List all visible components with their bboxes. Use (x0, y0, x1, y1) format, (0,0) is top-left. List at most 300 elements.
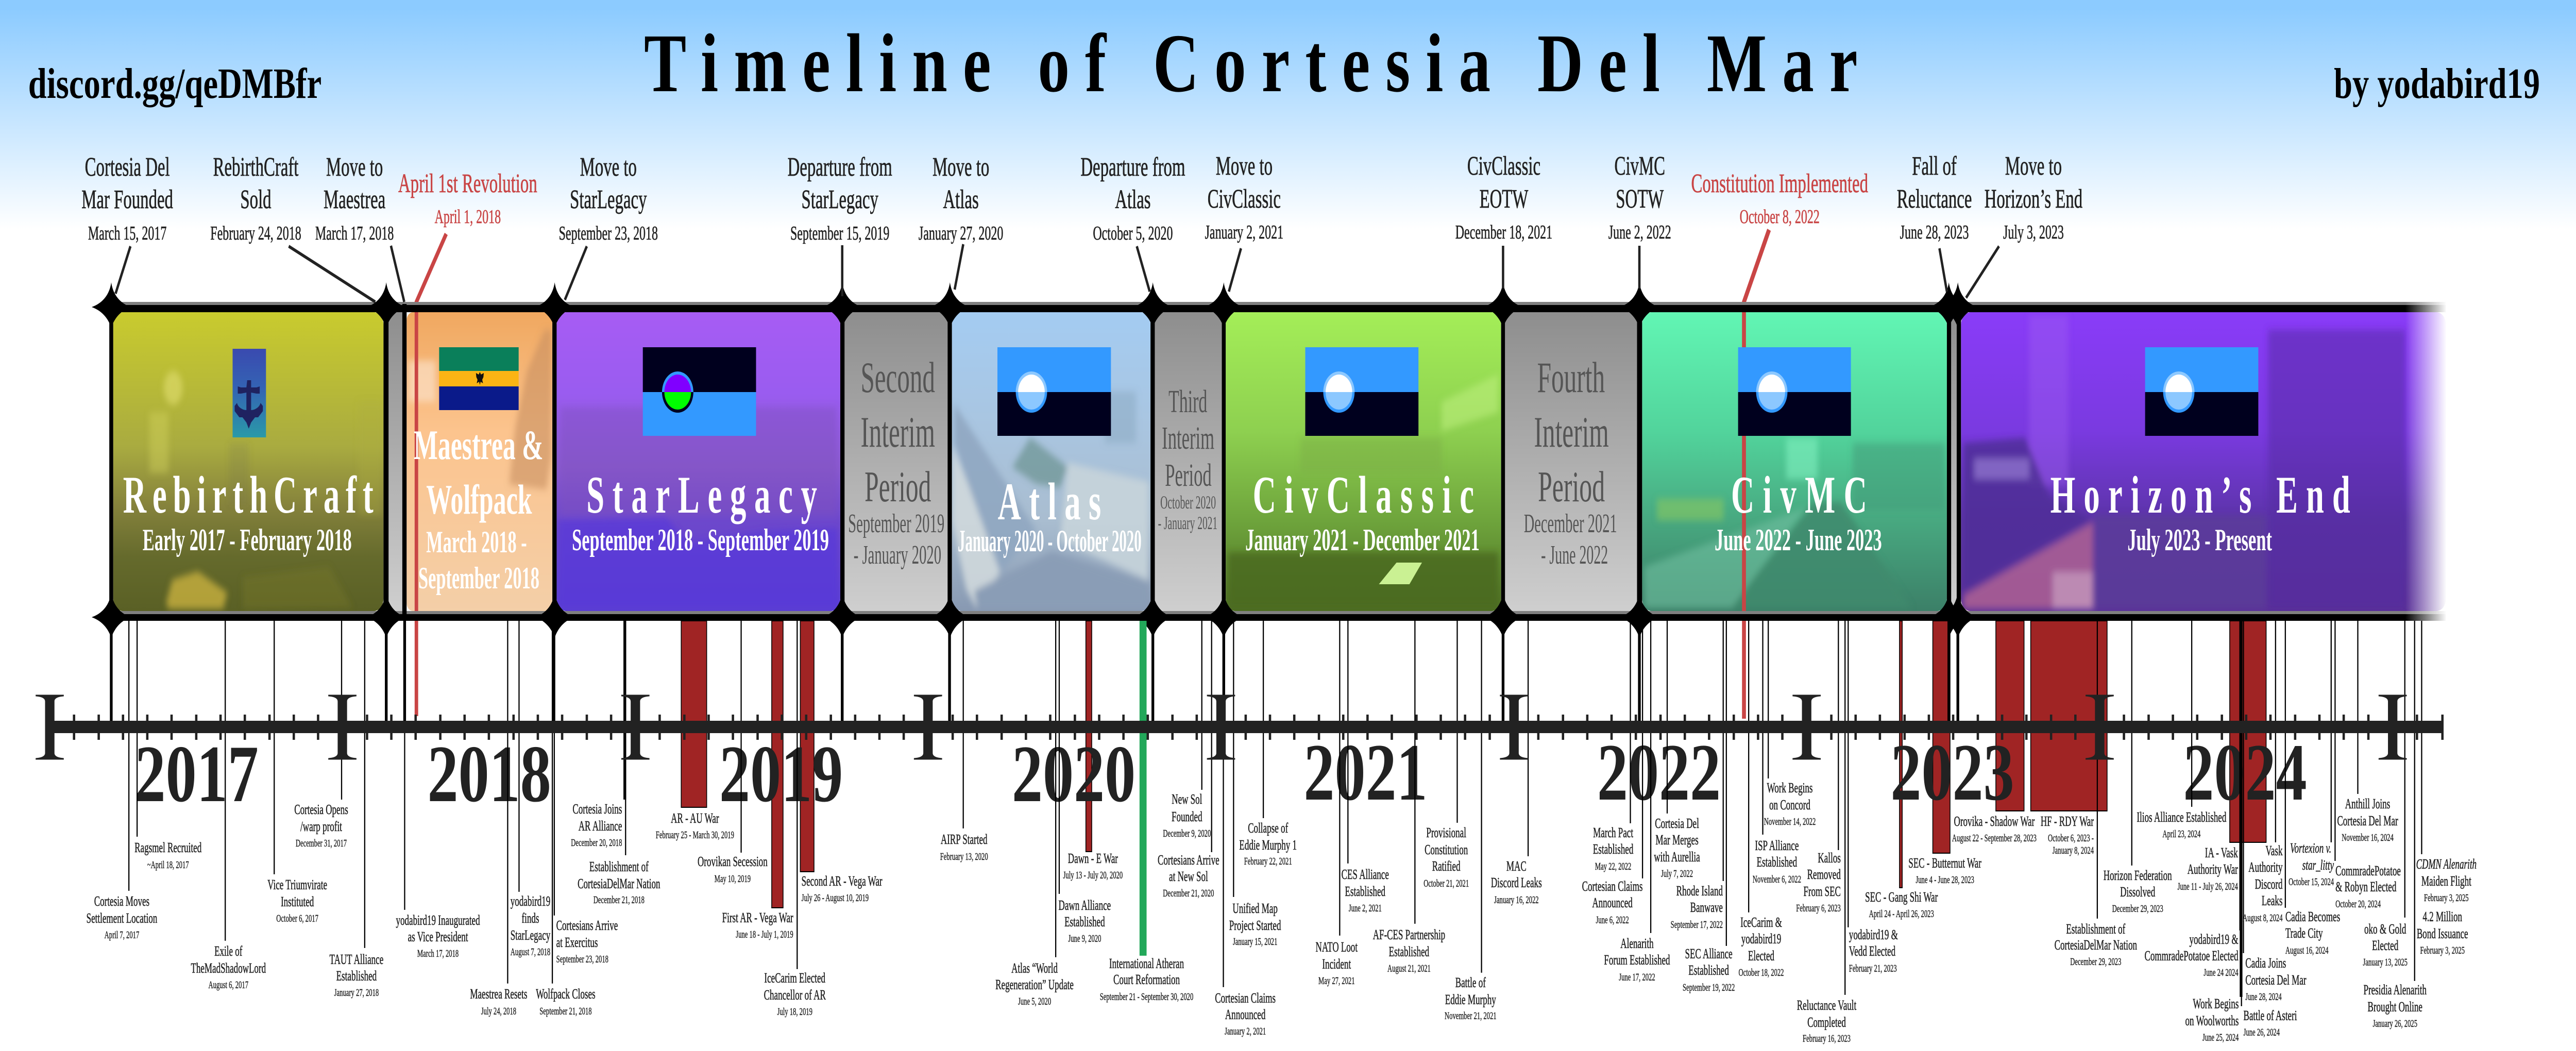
label: IceCarim Elected Chancellor of AR: July 18, 2019 (777, 1006, 812, 1018)
label: Atlas World Regeneration Update: Atlas “World (1011, 960, 1058, 976)
label: AF-CES Partnership Established: Established (1389, 944, 1429, 959)
label: Kallos Removed From SEC: February 6, 2023 (1796, 902, 1841, 914)
top label: Move to Maestrea: Maestrea (324, 185, 385, 214)
label: Cadia Joins Cortesia Del Mar: Cadia Joins (2245, 955, 2286, 971)
label: Reluctance Vault Completed: Reluctance Vault (1797, 997, 1857, 1013)
label: Work Begins on Woolworths: Work Begins (2193, 996, 2239, 1011)
panel: Maestrea and Wolfpack era (406, 312, 552, 611)
label: yodabird19 Inaugurated as Vice President (396, 912, 480, 959)
label: Establishment of CortesiaDelMar Nation: CortesiaDelMar Nation (578, 876, 660, 891)
top label: Cortesia Del Mar Founded: Mar Founded (81, 185, 173, 214)
label: Cadia Becomes Trade City: August 16, 2024 (2285, 944, 2329, 956)
era title: Fourth Interim Period: Period (1538, 463, 1605, 511)
label: Cortesians Arrive at Exercitus: Cortesians Arrive (556, 918, 618, 933)
label: Second AR - Vega War: July 26 - August 10, 2019 (802, 892, 869, 904)
label: Battle of Asteri: June 26, 2024 (2243, 1026, 2280, 1038)
label: Alenarith Forum Established: Alenarith (1620, 936, 1654, 951)
label: Wolfpack Closes: September 21, 2018 (539, 1005, 592, 1017)
label: Ragsmel Recruited (134, 840, 201, 871)
label: Presidia Alenarith Brought Online (2363, 982, 2427, 1029)
label: Provisional Constitution Ratified: October 21, 2021 (1423, 877, 1469, 889)
label: Anthill Joins Cortesia Del Mar (2337, 796, 2398, 843)
label: March Pact Established: Established (1593, 841, 1633, 857)
panel: Second Interim Period (844, 312, 947, 611)
top label: Move to Atlas: Atlas (943, 185, 979, 214)
label: Dawn Alliance Established (1059, 897, 1111, 944)
label: Orovika - Shadow War: August 22 - September 28, 2023 (1952, 832, 2037, 844)
label: Vortexion v. star_litty: Vortexion v. (2290, 840, 2331, 856)
label: Dawn Alliance Established: Dawn Alliance (1059, 897, 1111, 913)
top label: Departure from Atlas: Departure from (1080, 152, 1185, 182)
label: Second AR - Vega War: Second AR - Vega War (802, 873, 883, 889)
label: Cortesia Opens /warp profit: /warp profit (300, 819, 342, 834)
label: IceCarim Elected Chancellor of AR (764, 970, 826, 1018)
era title: Second Interim Period: Period (865, 463, 931, 511)
label: yodabird19 finds StarLegacy: finds (521, 910, 539, 926)
era title: CivClassic: January 2021 - December 2021 (1245, 523, 1480, 557)
label: CDMN Alenarith Maiden Flight (2416, 856, 2477, 904)
label: Ragsmel Recruited: Ragsmel Recruited (134, 840, 201, 855)
year numeral 2022: 2022 (1597, 727, 1721, 818)
panel: StarLegacy era (556, 312, 840, 611)
label: Horizon Federation Dissolved (2104, 868, 2172, 914)
label: Alenarith Forum Established: June 17, 2022 (1619, 971, 1655, 983)
label: ISP Alliance Established: Established (1757, 854, 1797, 870)
title: Timeline of Cortesia Del Mar (644, 18, 1858, 110)
era title: RebirthCraft: Early 2017 - February 2018 (143, 523, 352, 557)
label: CDMN Alenarith Maiden Flight: February 3, 2025 (2424, 892, 2469, 904)
label: New Sol Founded: December 9, 2020 (1163, 827, 1211, 839)
era title: Third Interim Period: Third (1168, 384, 1207, 419)
label: SEC - Butternut War: SEC - Butternut War (1908, 855, 1981, 871)
label: Ilios Alliance Established: April 23, 2024 (2162, 828, 2201, 840)
label: Atlas World Regeneration Update: Regeneration” Update (995, 977, 1074, 992)
era title: Fourth Interim Period: - June 2022 (1541, 540, 1608, 569)
red marker: April 1st Revolution (416, 234, 446, 716)
label: New Sol Founded: Founded (1172, 809, 1202, 824)
label: Atlas World Regeneration Update: June 5, 2020 (1018, 995, 1051, 1007)
label: Battle of Eddie Murphy: Battle of (1455, 975, 1486, 990)
label: yodabird19 finds StarLegacy (511, 893, 551, 958)
label: Work Begins on Woolworths: on Woolworths (2185, 1013, 2239, 1028)
label: NATO Loot Incident: NATO Loot (1316, 939, 1358, 955)
top label: CivClassic EOTW: December 18, 2021 (1455, 222, 1552, 243)
label: yodabird19 and CommradePotatoe Elected: yodabird19 & (2190, 931, 2239, 947)
label: International Atheran Court Reformation: September 21 - September 30, 2020 (1100, 991, 1193, 1003)
label: Cortesia Joins AR Alliance: AR Alliance (579, 818, 622, 834)
label: Cortesia Del Mar Merges with Aurellia (1654, 816, 1700, 879)
label: ISP Alliance Established: ISP Alliance (1755, 838, 1799, 853)
label: Rhode Island Banwave: Banwave (1690, 900, 1723, 915)
label: Cortesia Moves Settlement Location (87, 893, 157, 941)
year numeral 2024: 2024 (2183, 727, 2307, 818)
label: Vortexion v. star_litty (2289, 840, 2334, 888)
era title: StarLegacy: September 2018 - September 2019 (572, 523, 829, 557)
label: International Atheran Court Reformation: Court Reformation (1113, 972, 1180, 987)
label: yodabird19 and Vedd Elected: yodabird19 & (1849, 927, 1898, 942)
top label: Constitution Implemented (1691, 169, 1868, 227)
top label: Fall of Reluctance (1897, 151, 1972, 243)
label: Work Begins on Woolworths: June 25, 2024 (2202, 1031, 2239, 1043)
label: Ilios Alliance Established (2137, 809, 2226, 840)
top label: Cortesia Del Mar Founded: March 15, 2017 (88, 223, 166, 244)
right edge fade (2405, 299, 2447, 623)
label: CommradePotatoe and Robyn Elected: October 20, 2024 (2335, 898, 2381, 910)
label: Cortesia Joins AR Alliance: December 20, 2018 (571, 837, 622, 849)
event connector lines (129, 621, 2421, 1006)
label: Cortesia Joins AR Alliance: Cortesia Joins (572, 801, 622, 817)
top label: Move to StarLegacy: StarLegacy (570, 185, 647, 214)
label: Horizon Federation Dissolved: Dissolved (2120, 884, 2155, 900)
label: Kallos Removed From SEC (1796, 850, 1841, 914)
label: Vortexion v. star_litty: October 15, 2024 (2289, 876, 2334, 888)
label: Work Begins on Concord: Work Begins (1767, 780, 1812, 795)
label: SEC Alliance Established: SEC Alliance (1685, 946, 1733, 961)
top label: Move to Atlas: Move to (933, 152, 989, 182)
label: HF - RDY War: January 8, 2024 (2053, 844, 2094, 856)
top label: Move to Horizon's End (1985, 151, 2082, 243)
label: CDMN Alenarith Maiden Flight: CDMN Alenarith (2416, 856, 2477, 872)
top label: Constitution Implemented: October 8, 2022 (1740, 206, 1820, 227)
label: Battle of Eddie Murphy: Eddie Murphy (1445, 992, 1496, 1007)
label: yodabird19 Inaugurated as Vice President: as Vice President (408, 929, 468, 944)
label: Cortesian Claims Announced 2022 (1582, 878, 1642, 926)
label: Second AR - Vega War (802, 873, 883, 904)
top label: Move to Atlas (919, 152, 1003, 244)
top label: RebirthCraft Sold: February 24, 2018 (210, 223, 301, 244)
label: CommradePotatoe and Robyn Elected: & Robyn Elected (2335, 879, 2396, 894)
era title: CivMC: June 2022 - June 2023 (1715, 523, 1882, 557)
era title: Second Interim Period (848, 354, 944, 569)
panel: CivMC era (1642, 312, 1947, 611)
label: Collapse of Eddie Murphy 1 (1239, 820, 1297, 867)
label: CES Alliance Established: June 2, 2021 (1349, 902, 1382, 914)
label: Work Begins on Woolworths (2185, 996, 2239, 1043)
icon: StarLegacy flag (643, 347, 756, 436)
top label: Move to CivClassic: January 2, 2021 (1205, 222, 1283, 243)
label: Collapse of Eddie Murphy 1: Eddie Murphy 1 (1239, 837, 1297, 853)
year numeral 2019: 2019 (719, 729, 843, 819)
label: Unified Map Project Started: Project Started (1229, 918, 1281, 933)
label: Rhode Island Banwave (1671, 883, 1723, 930)
era title: Horizon's End: Horizon’s End (2050, 466, 2350, 524)
label: SEC - Butternut War (1908, 855, 1981, 886)
label: Maestrea Resets (470, 986, 527, 1017)
label: MAC Discord Leaks: MAC (1506, 858, 1527, 874)
label: 4.2 Million Bond Issuance: Bond Issuance (2417, 926, 2468, 941)
label: Orovikan Secession: Orovikan Secession (698, 854, 768, 869)
label: AF-CES Partnership Established (1373, 927, 1445, 974)
era title: Atlas: Atlas (998, 472, 1101, 531)
label: Establishment of CortesiaDelMar Nation 2023: Establishment of (2066, 921, 2126, 937)
label: Wolfpack Closes (536, 986, 596, 1017)
top label: April 1st Revolution: April 1, 2018 (435, 206, 501, 227)
label: Cortesian Claims Announced 2022: Cortesian Claims (1582, 878, 1642, 894)
label: IA - Vask Authority War (2178, 845, 2238, 892)
label: IceCarim and yodabird19 Elected: October 18, 2022 (1739, 967, 1784, 978)
top label: Move to StarLegacy (559, 152, 658, 244)
era title: Maestrea and Wolfpack: September 2018 (418, 561, 539, 596)
label: Vice Triumvirate Instituted: October 6, 2017 (276, 912, 318, 924)
label: yodabird19 and Vedd Elected: February 21, 2023 (1849, 962, 1897, 974)
top label: CivMC SOTW (1608, 151, 1671, 243)
label: Exile of TheMadShadowLord (191, 943, 266, 991)
label: yodabird19 finds StarLegacy: August 7, 2018 (511, 946, 550, 958)
panel: RebirthCraft era (113, 312, 383, 611)
label: AR - AU War (656, 810, 734, 841)
label: 4.2 Million Bond Issuance: 4.2 Million (2422, 909, 2462, 924)
era boundary stars (92, 282, 1977, 638)
label: Establishment of CortesiaDelMar Nation 2023: December 29, 2023 (2070, 956, 2121, 968)
month ticks (74, 715, 2443, 740)
year numeral 2023: 2023 (1890, 727, 2014, 818)
year numeral 2017: 2017 (135, 729, 259, 819)
label: Vice Triumvirate Instituted (267, 877, 327, 924)
label: AF-CES Partnership Established: AF-CES Partnership (1373, 927, 1445, 942)
icon: CivClassic flag (1305, 347, 1418, 436)
label: yodabird19 finds StarLegacy: StarLegacy (511, 927, 551, 943)
label: MAC Discord Leaks: January 16, 2022 (1494, 894, 1539, 906)
label: Vask Authority Discord Leaks: Discord (2255, 876, 2283, 892)
era title: CivClassic: CivClassic (1253, 466, 1474, 524)
label: Cortesia Del Mar Merges with Aurellia: Cortesia Del (1655, 816, 1699, 831)
top label: Move to Horizon's End: Horizon’s End (1985, 184, 2082, 214)
label: International Atheran Court Reformation: International Atheran (1109, 956, 1184, 971)
label: AIRP Started: AIRP Started (941, 832, 988, 847)
label: CommradePotatoe and Robyn Elected: CommradePotatoe (2335, 863, 2401, 878)
label: AIRP Started: February 13, 2020 (940, 851, 988, 862)
label: Vice Triumvirate Instituted: Vice Triumvirate (267, 877, 327, 892)
label: oko and Gold Elected (2363, 921, 2408, 968)
label: Battle of Eddie Murphy: November 21, 2021 (1445, 1010, 1497, 1022)
label: Cortesia Opens /warp profit: Cortesia Opens (294, 802, 348, 817)
label: IA - Vask Authority War: IA - Vask (2205, 845, 2238, 860)
label: SEC - Gang Shi War (1865, 889, 1938, 920)
era title: CivClassic (1245, 466, 1480, 557)
label: TAUT Alliance Established: January 27, 2018 (334, 987, 379, 998)
label: Orovikan Secession: May 10, 2019 (715, 873, 751, 885)
label: Vortexion v. star_litty: star_litty (2302, 857, 2334, 873)
label: First AR - Vega War (722, 910, 793, 940)
icon: Horizon's End flag (2145, 347, 2258, 436)
label: CES Alliance Established: Established (1345, 884, 1385, 899)
label: AR - AU War: AR - AU War (671, 810, 719, 826)
top label: CivClassic EOTW (1455, 151, 1552, 243)
label: IceCarim and yodabird19 Elected: Elected (1748, 948, 1774, 963)
label: Alenarith Forum Established: Forum Established (1604, 952, 1670, 968)
label: Establishment of CortesiaDelMar Nation: Establishment of (589, 859, 649, 874)
label: IA - Vask Authority War: Authority War (2188, 861, 2238, 877)
label: Cortesians Arrive at New Sol: December 21, 2020 (1163, 887, 1214, 899)
top label: RebirthCraft Sold (210, 152, 301, 244)
label: SEC Alliance Established (1683, 946, 1735, 993)
label: Cadia Joins Cortesia Del Mar: Cortesia Del Mar (2245, 972, 2307, 988)
era title: CivMC (1715, 466, 1882, 557)
panel: Horizon's End era (1961, 312, 2446, 611)
label: Dawn - E War (1063, 851, 1123, 881)
era title: Maestrea and Wolfpack (414, 421, 544, 596)
label: Presidia Alenarith Brought Online: January 26, 2025 (2372, 1018, 2417, 1029)
label: Work Begins on Concord (1764, 780, 1816, 827)
label: Cadia Joins Cortesia Del Mar: June 28, 2024 (2245, 991, 2282, 1003)
top label: Move to CivClassic: CivClassic (1208, 184, 1281, 214)
label: oko and Gold Elected: January 13, 2025 (2363, 956, 2408, 968)
label: SEC Alliance Established: Established (1688, 962, 1729, 978)
label: TAUT Alliance Established: TAUT Alliance (330, 952, 383, 967)
label: Unified Map Project Started: Unified Map (1232, 901, 1278, 916)
top label: Move to CivClassic: Move to (1216, 151, 1273, 181)
top label: Departure from Atlas: Atlas (1115, 185, 1151, 214)
top label: CivMC SOTW: CivMC (1615, 151, 1665, 181)
label: Ilios Alliance Established: Ilios Alliance Established (2137, 809, 2226, 825)
label: IceCarim and yodabird19 Elected (1739, 914, 1784, 978)
label: Reluctance Vault Completed: Completed (1807, 1014, 1846, 1030)
top label: CivClassic EOTW: CivClassic (1467, 151, 1540, 181)
label: TAUT Alliance Established (330, 952, 383, 998)
label: Kallos Removed From SEC: From SEC (1803, 884, 1841, 899)
label: Provisional Constitution Ratified: Constitution (1425, 842, 1468, 857)
era title: Maestrea and Wolfpack: Wolfpack (426, 476, 532, 523)
label: Reluctance Vault Completed (1797, 997, 1857, 1044)
panel: Atlas era (952, 312, 1150, 611)
era title: RebirthCraft (123, 466, 374, 557)
era title: StarLegacy: StarLegacy (586, 466, 817, 524)
label: IceCarim Elected Chancellor of AR: Chancellor of AR (764, 987, 826, 1003)
label: Maestrea Resets: Maestrea Resets (470, 986, 527, 1002)
label: SEC - Gang Shi War: SEC - Gang Shi War (1865, 889, 1938, 905)
red marker: Constitution Implemented (1744, 230, 1769, 719)
era title: Third Interim Period: October 2020 (1160, 492, 1216, 513)
label: March Pact Established: May 22, 2022 (1595, 860, 1631, 872)
panel: Third Interim Period (1155, 312, 1222, 611)
era title: Maestrea and Wolfpack: Maestrea & (414, 421, 544, 468)
label: yodabird19 and CommradePotatoe Elected (2145, 931, 2239, 978)
label: Provisional Constitution Ratified: Provisional (1426, 825, 1466, 840)
top label: April 1st Revolution: April 1st Revolution (398, 169, 537, 198)
label: Cadia Becomes Trade City: Cadia Becomes (2285, 909, 2340, 924)
top label: Departure from StarLegacy: September 15, 2019 (790, 223, 889, 244)
label: CDMN Alenarith Maiden Flight: Maiden Flight (2421, 873, 2471, 889)
label: Rhode Island Banwave: September 17, 2022 (1671, 919, 1723, 930)
label: Cadia Joins Cortesia Del Mar (2245, 955, 2307, 1003)
label: MAC Discord Leaks (1491, 858, 1542, 906)
label: yodabird19 Inaugurated as Vice President: March 17, 2018 (417, 947, 459, 959)
era title: Atlas: January 2020 - October 2020 (958, 524, 1142, 558)
top label: Move to Maestrea (315, 152, 394, 244)
top label: RebirthCraft Sold: RebirthCraft (213, 152, 298, 182)
label: Exile of TheMadShadowLord: Exile of (214, 943, 243, 959)
label: ISP Alliance Established (1753, 838, 1801, 885)
top label: Departure from Atlas: October 5, 2020 (1093, 223, 1173, 244)
era title: Second Interim Period: Interim (860, 409, 935, 456)
label: Orovika - Shadow War (1952, 813, 2037, 844)
label: Cortesia Del Mar Merges with Aurellia: July 7, 2022 (1661, 868, 1693, 879)
label: Vask Authority Discord Leaks: Authority (2248, 859, 2283, 875)
label: CES Alliance Established (1342, 867, 1389, 914)
label: Establishment of CortesiaDelMar Nation: December 21, 2018 (594, 894, 645, 906)
era title: Horizon's End: July 2023 - Present (2127, 523, 2272, 557)
top label: Move to Atlas: January 27, 2020 (919, 223, 1003, 244)
panel: transition strip (388, 312, 403, 611)
label: Cortesians Arrive at Exercitus: at Exercitus (556, 935, 598, 950)
label: Cortesia Moves Settlement Location: Cortesia Moves (94, 893, 149, 909)
label: Horizon Federation Dissolved: Horizon Federation (2104, 868, 2172, 883)
era title: RebirthCraft: RebirthCraft (123, 466, 374, 524)
label: yodabird19 and Vedd Elected: Vedd Elected (1849, 943, 1895, 959)
label: IceCarim Elected Chancellor of AR: IceCarim Elected (764, 970, 825, 986)
label: New Sol Founded (1163, 791, 1211, 839)
label: Battle of Asteri (2243, 1008, 2297, 1038)
label: Dawn - E War: Dawn - E War (1068, 851, 1118, 866)
label: Cortesia Moves Settlement Location: April 7, 2017 (105, 929, 139, 941)
era title: Second Interim Period: Second (860, 354, 935, 402)
label: Vice Triumvirate Instituted: Instituted (281, 894, 314, 909)
label: Cortesian Claims Announced 2021: Cortesian Claims (1215, 990, 1276, 1006)
label: Anthill Joins Cortesia Del Mar: Anthill Joins (2345, 796, 2390, 811)
timeline axis (36, 694, 2444, 759)
label: Work Begins on Concord: on Concord (1769, 797, 1810, 812)
top label: Move to Horizon's End: Move to (2005, 151, 2062, 181)
label: 4.2 Million Bond Issuance (2417, 909, 2468, 956)
discord link: discord.gg/qeDMBfr (28, 60, 321, 108)
icon: CivMC flag (1738, 347, 1851, 436)
era title: Fourth Interim Period (1524, 354, 1617, 569)
label: Vask Authority Discord Leaks: August 8, 2024 (2243, 912, 2283, 924)
label: Establishment of CortesiaDelMar Nation (578, 859, 660, 906)
label: Establishment of CortesiaDelMar Nation 2023 (2055, 921, 2137, 968)
label: Cortesia Opens /warp profit (294, 802, 348, 849)
label: SEC Alliance Established: September 19, 2022 (1683, 981, 1735, 993)
era title: Third Interim Period: Period (1165, 457, 1212, 493)
year numeral 2021: 2021 (1303, 727, 1428, 818)
label: Vask Authority Discord Leaks: Vask (2265, 843, 2283, 858)
label: AF-CES Partnership Established: August 21, 2021 (1387, 962, 1431, 974)
era title: Third Interim Period (1158, 384, 1217, 533)
label: Cortesian Claims Announced 2021: Announced (1225, 1007, 1265, 1022)
label: Provisional Constitution Ratified (1423, 825, 1469, 889)
label: IceCarim and yodabird19 Elected: yodabird19 (1741, 931, 1781, 946)
top label: CivClassic EOTW: EOTW (1480, 184, 1528, 214)
label: Horizon Federation Dissolved: December 29, 2023 (2112, 903, 2163, 914)
label: Establishment of CortesiaDelMar Nation 2023: CortesiaDelMar Nation (2055, 937, 2137, 953)
label: Reluctance Vault Completed: February 16, 2023 (1803, 1032, 1851, 1044)
author credit: by yodabird19 (2334, 60, 2540, 108)
label: Presidia Alenarith Brought Online: Presidia Alenarith (2363, 982, 2427, 997)
year markers (36, 694, 2407, 759)
top label: Move to Horizon's End: July 3, 2023 (2003, 222, 2064, 243)
label: Unified Map Project Started (1229, 901, 1281, 947)
label: NATO Loot Incident (1316, 939, 1358, 987)
label: March Pact Established (1593, 825, 1634, 872)
era title: Fourth Interim Period: Fourth (1537, 354, 1605, 402)
label: First AR - Vega War: June 18 - July 1, 2019 (736, 928, 793, 940)
label: IA - Vask Authority War: June 11 - July 26, 2024 (2178, 880, 2238, 892)
era title: Atlas (958, 472, 1142, 558)
top label: CivMC SOTW: June 2, 2022 (1608, 222, 1671, 243)
top label: April 1st Revolution (398, 169, 537, 227)
label: Cortesians Arrive at Exercitus (556, 918, 618, 965)
era title: CivMC: CivMC (1731, 466, 1867, 524)
label: Cadia Becomes Trade City (2285, 909, 2340, 956)
label: Cortesian Claims Announced 2021 (1215, 990, 1276, 1037)
panel: CivClassic era (1226, 312, 1501, 611)
top label: Cortesia Del Mar Founded: Cortesia Del (85, 152, 170, 182)
era title: StarLegacy (572, 466, 829, 557)
label: New Sol Founded: New Sol (1172, 791, 1202, 807)
label: Kallos Removed From SEC: Kallos (1818, 850, 1841, 866)
label: yodabird19 and CommradePotatoe Elected: CommradePotatoe Elected (2145, 948, 2239, 963)
label: Work Begins on Concord: November 14, 2022 (1764, 816, 1816, 827)
